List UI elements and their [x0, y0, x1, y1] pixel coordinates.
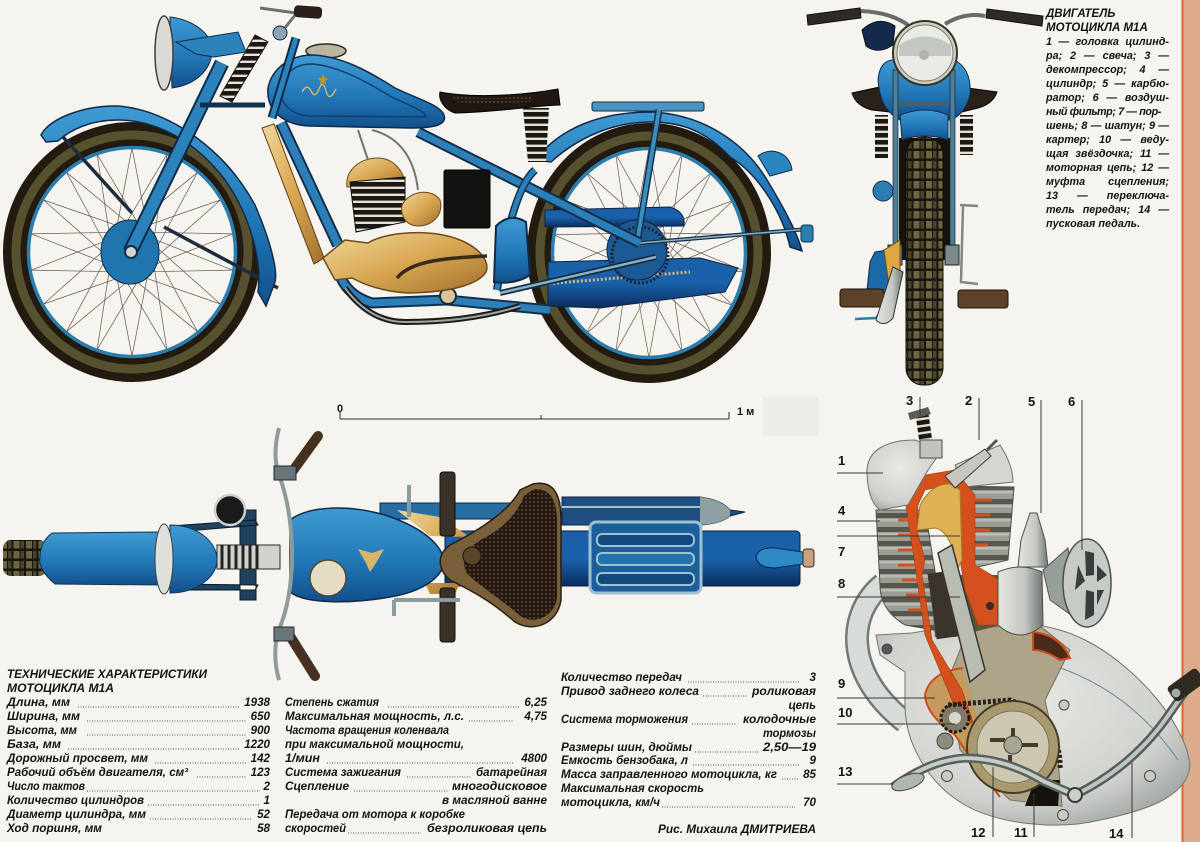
callout numbers and leader lines: 7: [838, 544, 845, 559]
spec column 2: Сцепление: [285, 780, 350, 793]
engine legend text: картер; 10 — веду-: [1046, 134, 1169, 146]
spec column 2: Система зажигания: [285, 766, 401, 779]
engine legend text: МОТОЦИКЛА М1А: [1046, 22, 1148, 34]
kick lever: [397, 256, 487, 278]
front wheel: [0, 71, 284, 402]
scale bar: 0: [337, 403, 343, 415]
gold engine glimpses: [397, 510, 470, 594]
callout numbers and leader lines: [837, 393, 1132, 841]
callout numbers and leader lines: 9: [838, 676, 845, 691]
spec column 1: 1220: [244, 738, 271, 751]
front fender: [40, 532, 160, 585]
spec column 1: Рабочий объём двигателя, см³: [7, 766, 189, 779]
spec column 1: 2: [263, 780, 271, 793]
spec column 2: 4800: [520, 752, 548, 765]
spec column 3: [561, 671, 817, 809]
fender: [900, 110, 948, 140]
spec column 3: цепь: [789, 699, 816, 712]
front tyre: [3, 540, 47, 576]
engine legend text: 13 — переключа-: [1046, 190, 1169, 202]
spec column 2: 1/мин: [285, 752, 320, 765]
crankcase: [323, 233, 487, 293]
engine: [323, 130, 490, 293]
front spring: [220, 35, 268, 102]
engine legend text: 1 — головка цилинд-: [1046, 36, 1169, 48]
engine legend text: тель передач; 14 —: [1046, 204, 1169, 216]
spec column 3: мотоцикла, км/ч: [561, 796, 660, 809]
headlight: [155, 16, 246, 90]
engine legend text: цилиндр; 5 — карбю-: [1046, 78, 1169, 90]
decompressor: [908, 407, 942, 458]
luggage rack: [590, 522, 701, 593]
callout numbers and leader lines: 6: [1068, 394, 1075, 409]
orange cut cylinder: [898, 470, 1000, 728]
headlight: [155, 524, 217, 594]
spec column 3: 85: [803, 768, 817, 781]
plug tip: [987, 440, 997, 450]
spec column 3: Привод заднего колеса: [561, 685, 700, 698]
spec column 1: Дорожный просвет, мм: [6, 752, 148, 765]
spec column 3: роликовая: [751, 685, 816, 698]
spec column 1: Диаметр цилиндра, мм: [6, 808, 146, 821]
callout numbers and leader lines: 4: [838, 503, 846, 518]
engine legend text: [1045, 8, 1170, 230]
spark plug: [945, 449, 991, 488]
callout numbers and leader lines: 8: [838, 576, 845, 591]
spec table title: [7, 668, 208, 695]
rear body: [445, 531, 800, 586]
cylinder fins right: [955, 486, 1014, 570]
callout numbers and leader lines: 14: [1109, 826, 1124, 841]
dark cavity behind rod: [930, 575, 1000, 637]
spec column 1: Ход поршня, мм: [6, 822, 102, 835]
spec column 1: База, мм: [7, 738, 61, 751]
tail lamp: [756, 548, 814, 568]
battery: [444, 170, 490, 228]
fork legs: [888, 70, 959, 265]
pale retouch patch: [763, 397, 819, 436]
rear wheel: [488, 71, 794, 404]
callout numbers and leader lines: 1: [838, 453, 845, 468]
spec column 1: 142: [251, 752, 271, 765]
kick pedal: [1068, 667, 1200, 802]
illustrator credit: Рис. Михаила ДМИТРИЕВА: [658, 823, 816, 836]
crankcase bolts: [882, 644, 1156, 820]
engine legend text: ра; 2 — свеча; 3 —: [1046, 50, 1169, 62]
engine legend text: пусковая педаль.: [1046, 218, 1140, 230]
carburettor: [402, 192, 441, 226]
cylinder fins left: [876, 510, 945, 632]
spec column 3: 2,50—19: [762, 741, 817, 754]
cylinder head: [347, 158, 405, 187]
rear chain guard and muffler: [545, 207, 738, 308]
spec column 1: 900: [251, 724, 271, 737]
spec column 2: 4,75: [523, 710, 548, 723]
spec column 2: многодисковое: [452, 780, 548, 793]
callout numbers and leader lines: 12: [971, 825, 985, 840]
handlebars: [807, 8, 1043, 26]
silencer: [380, 497, 745, 525]
engine legend text: ный фильтр; 7 — пор-: [1046, 106, 1161, 118]
springs: [875, 115, 973, 158]
air filter: [1043, 539, 1111, 627]
exhaust silencer: [876, 267, 903, 324]
cylinder fins: [350, 177, 405, 232]
drive sprocket: [941, 704, 969, 732]
spec column 2: Частота вращения коленвала: [285, 724, 449, 737]
spec column 1: Число тактов: [7, 780, 85, 793]
spec column 1: Высота, мм: [7, 724, 77, 737]
spec table title: ТЕХНИЧЕСКИЕ ХАРАКТЕРИСТИКИ: [7, 668, 208, 681]
fuel tank: [268, 44, 444, 128]
cut section outline: [925, 668, 1000, 797]
scale bar: 1 м: [737, 406, 754, 418]
right page edge stripe: [1182, 0, 1200, 842]
spec column 1: Ширина, мм: [7, 710, 80, 723]
spec column 2: Степень сжатия: [285, 696, 379, 709]
spec column 3: Емкость бензобака, л: [561, 754, 689, 767]
spec column 1: 1: [264, 794, 270, 807]
saddle: [440, 483, 561, 627]
engine legend text: ДВИГАТЕЛЬ: [1046, 8, 1115, 20]
spec column 1: Длина, мм: [6, 696, 70, 709]
head right cap: [955, 445, 1013, 487]
hub and engine parts: [855, 181, 978, 319]
engine legend text: декомпрессор; 4 —: [1046, 64, 1169, 76]
spec column 1: 1938: [244, 696, 271, 709]
footrests: [394, 472, 460, 642]
fork crossmembers: [170, 510, 258, 600]
tank emblem: [302, 74, 336, 97]
head dome: [867, 440, 942, 510]
spec column 1: 52: [257, 808, 271, 821]
spec column 3: 3: [810, 671, 817, 684]
speedometer: [215, 495, 245, 525]
handlebar and grip: [260, 5, 322, 40]
spec column 2: 6,25: [524, 696, 548, 709]
spec column 3: колодочные: [743, 713, 817, 726]
saddle ends: [852, 87, 997, 112]
spec column 2: батарейная: [476, 766, 547, 779]
spec column 2: [285, 696, 548, 835]
spec column 2: Максимальная мощность, л.с.: [285, 710, 464, 723]
spec column 2: при максимальной мощности,: [285, 738, 464, 751]
spec column 3: 70: [803, 796, 817, 809]
engine cutaway: [837, 393, 1200, 841]
spec column 3: 9: [810, 754, 817, 767]
callout numbers and leader lines: 10: [838, 705, 852, 720]
spec column 3: Количество передач: [561, 671, 682, 684]
front fender: [41, 106, 276, 306]
headlight: [893, 21, 957, 85]
front fender stays: [63, 137, 278, 288]
spec column 3: Масса заправленного мотоцикла, кг: [561, 768, 777, 781]
callout numbers and leader lines: 3: [906, 393, 913, 408]
front view of motorcycle: [807, 8, 1043, 385]
spec column 3: Размеры шин, дюймы: [561, 741, 692, 754]
winged emblem: [358, 549, 384, 572]
engine legend text: щая звёздочка; 11 —: [1046, 148, 1169, 160]
footrests: [840, 289, 1008, 308]
spec table title: МОТОЦИКЛА М1А: [7, 682, 114, 695]
motorcycle frame tubes: [281, 123, 656, 322]
fork well: [899, 138, 950, 260]
front tyre: [906, 137, 943, 385]
clutch and motor chain: [948, 700, 1060, 793]
handlebar: [274, 428, 318, 680]
filler cap: [310, 560, 346, 596]
scale bar: [337, 403, 754, 419]
clutch housing: [948, 622, 1070, 806]
exhaust pipe: [262, 124, 324, 264]
toolbox: [494, 218, 530, 283]
front fork: [125, 38, 296, 258]
saddle: [440, 89, 560, 113]
callout numbers and leader lines: 2: [965, 393, 972, 408]
spec column 1: Количество цилиндров: [7, 794, 144, 807]
saddle spring: [523, 108, 549, 162]
top view of motorcycle: [3, 428, 814, 680]
engine legend text: моторная цепь; 12 —: [1046, 162, 1169, 174]
tank: [290, 508, 445, 602]
rear rack and strut: [592, 102, 813, 243]
callout numbers and leader lines: 13: [838, 764, 852, 779]
spec column 1: [6, 696, 271, 835]
engine legend text: шень; 8 — шатун; 9 —: [1046, 120, 1169, 132]
dark clutch recess: [1025, 780, 1060, 806]
engine legend text: муфта сцепления;: [1046, 176, 1169, 188]
side view of motorcycle: [0, 5, 813, 404]
spec column 3: тормозы: [763, 727, 816, 740]
orange cut window: [1033, 632, 1070, 660]
spec column 3: Максимальная скорость: [561, 782, 704, 795]
exhaust pipe loop: [857, 584, 905, 722]
connecting rod: [928, 545, 985, 682]
piston: [917, 484, 962, 568]
spec column 2: скоростей: [285, 822, 346, 835]
callout numbers and leader lines: 5: [1028, 394, 1035, 409]
gear lever: [890, 758, 1075, 795]
spec column 1: 58: [257, 822, 271, 835]
spec column 1: 650: [251, 710, 271, 723]
crankcase seam: [1052, 665, 1178, 760]
steering spring: [217, 545, 280, 569]
rear fender and tail light: [535, 112, 802, 251]
carburettor: [998, 513, 1048, 635]
crankcase: [876, 622, 1190, 825]
speedometer cup: [862, 21, 895, 50]
engine legend text: ратор; 6 — воздуш-: [1046, 92, 1169, 104]
callout numbers and leader lines: 11: [1014, 825, 1028, 840]
fuel line: [358, 130, 418, 190]
fork crossbar: [892, 102, 948, 106]
spec column 2: Передача от мотора к коробке: [285, 808, 466, 821]
spec column 1: 123: [251, 766, 271, 779]
tank: [878, 60, 970, 120]
spec column 3: Система торможения: [561, 713, 688, 726]
spec column 2: безроликовая цепь: [427, 822, 547, 835]
spec column 2: в масляной ванне: [442, 794, 548, 807]
